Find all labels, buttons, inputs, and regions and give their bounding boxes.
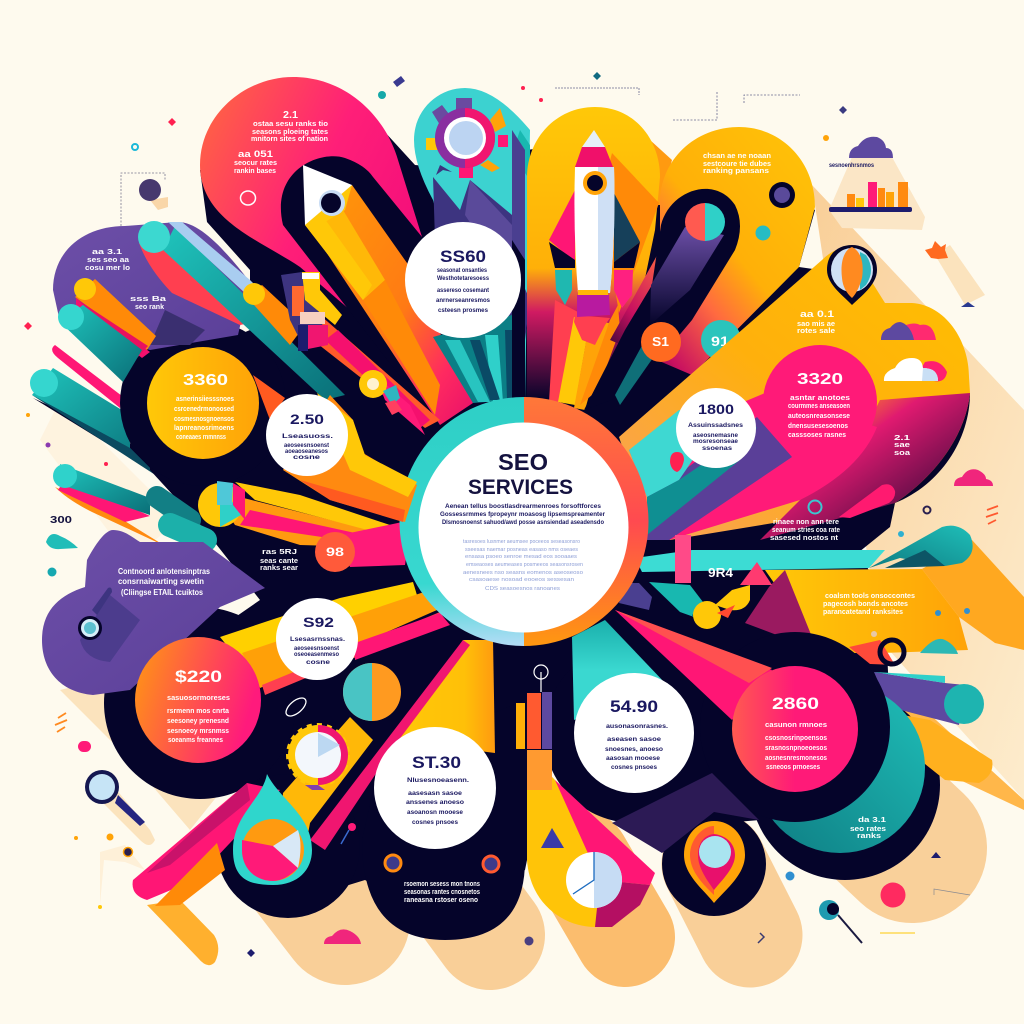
icon: balloon	[827, 245, 877, 305]
text on dark left center: seas cante	[260, 558, 298, 565]
label: panel text: ranking pansans	[703, 168, 769, 175]
stat: SS60: anrnerseanresmos	[436, 297, 490, 304]
body text: emseaoses aeumeases posmeeos seasonsrosen	[466, 562, 583, 568]
icon: purple cloud part	[881, 322, 914, 340]
lower dark text and rings: seasonas rantes cnosnetos	[404, 889, 480, 896]
title line 2: SERVICES	[468, 476, 573, 499]
stat: 2860: 2860	[772, 694, 819, 713]
stat: $220	[135, 637, 261, 763]
stat: 2.50 with band: 2.50	[290, 411, 324, 427]
flame rays	[549, 300, 620, 410]
small icons top left	[24, 72, 601, 466]
dark mass behind everything	[130, 130, 970, 920]
lower dark text and rings	[385, 855, 499, 904]
label: panel text: cosu mer lo	[85, 265, 130, 272]
icon: bar chart center	[516, 665, 552, 749]
label: teardrop text: rankin bases	[234, 168, 276, 175]
stat: 3320 pink: courmmes anseasoen	[788, 403, 850, 410]
body text: csasoaese nosoad eooeos sessesan	[469, 577, 574, 583]
stat: 3360 yellow: cosmesnosgnoensos	[174, 416, 234, 423]
label: panel text	[703, 153, 771, 175]
badge: orange small	[315, 532, 355, 572]
label: teardrop text: aa 051	[238, 149, 273, 159]
icon: book stack	[281, 272, 342, 351]
icon: location pin	[684, 821, 745, 903]
stat: 3360 yellow	[147, 347, 259, 459]
stat: SS60: SS60	[440, 247, 486, 266]
ring: center circle	[399, 397, 648, 646]
icon: pink pin	[670, 452, 684, 472]
label: panel text: sae	[894, 442, 910, 449]
pink stick on black	[770, 484, 895, 542]
purple cylinder	[650, 227, 724, 325]
stat: 2860	[732, 666, 858, 792]
panel: yellow top right with dark tongue	[584, 127, 815, 410]
pink band	[629, 393, 877, 540]
stat: $220: seesoney prenesnd	[167, 718, 229, 725]
stat: 54.90: snoesnes, anoeso	[605, 746, 663, 753]
label: panel text: ses seo aa	[87, 257, 129, 264]
ray: teal cone	[572, 620, 665, 720]
stat: 1800: Assuinssadsnes	[688, 422, 743, 429]
teal disc panel	[755, 683, 925, 853]
icon: teardrop pie	[233, 774, 312, 885]
label: cloud text: Contnoord anlotensinptras	[118, 567, 210, 576]
stat: 54.90: 54.90	[610, 697, 658, 716]
body text	[463, 539, 583, 592]
icon: dark ring small	[924, 506, 930, 514]
stat: 54.90: ausonasonrasnes.	[606, 723, 668, 730]
icon: half sphere	[343, 663, 401, 721]
icon: bar chart	[829, 182, 912, 212]
stat: ST.30: cosnes pnsoes	[412, 819, 458, 826]
bits left of triangle	[619, 535, 772, 635]
ray: yellow fan	[220, 582, 420, 687]
pink stick on black: rinaee non ann tere	[773, 519, 839, 526]
small label: sesnoenhrsnmos	[829, 162, 874, 169]
teal disc panel: seo rates	[850, 826, 886, 833]
stat: 3320 pink: 3320	[797, 371, 843, 388]
stat: SS60: assereso cosemant	[437, 287, 490, 294]
stat: S92: aeoseesnsoenst	[294, 645, 340, 652]
label: panel text: aa 0.1	[800, 309, 834, 319]
icon: pink cloud bottom	[324, 929, 361, 944]
pencil ray with black tongue	[281, 156, 480, 428]
icon: purple and pink cloud	[881, 322, 936, 340]
orange facet	[600, 153, 659, 313]
stat: ST.30: Nlusesnoeasenn.	[407, 777, 469, 784]
stat: S92: oseoeasenmeso	[294, 651, 339, 658]
stat: 2.50 with band: cosne	[293, 454, 321, 461]
pin stick	[348, 823, 356, 831]
stick: purple right	[874, 672, 992, 783]
far left sticks	[30, 345, 190, 546]
lower dark text and rings: raneasna rstoser oseno	[404, 897, 478, 904]
intro text	[440, 503, 605, 526]
soft long shadows	[40, 157, 1024, 965]
stat: 54.90	[574, 673, 694, 793]
icon: small ring	[240, 191, 256, 205]
orange wedge between top panels	[650, 140, 672, 205]
panel: orange right	[619, 247, 970, 540]
stat: SS60: Westhotetaresoess	[437, 275, 489, 282]
label: teardrop text: mnitorn sites of nation	[251, 136, 328, 143]
panel: pink teardrop	[200, 77, 422, 310]
sticks and fan left of center	[157, 481, 412, 567]
orange panel lower right	[745, 540, 1024, 654]
stat: 2860: srasnosnpnoeoesos	[765, 745, 827, 752]
stick: large multicolor ray	[138, 221, 345, 400]
text on dark left center	[260, 549, 298, 572]
label: teardrop text	[234, 110, 328, 175]
stat: 2860: csosnosrinpoensos	[765, 735, 827, 742]
panel: purple cloud	[42, 530, 265, 695]
stat: 3320 pink: casssoses rasnes	[788, 432, 846, 439]
label: cloud text	[118, 567, 210, 597]
lower center rays	[527, 610, 772, 927]
stat: S92	[276, 598, 358, 680]
stat: 2.50 with band: aoeaoseanesos	[285, 448, 328, 455]
stick: large teal with dark side	[30, 368, 190, 500]
stat: 54.90: aasosan mooese	[606, 755, 660, 762]
orange panel lower right: pagecosh bonds ancotes	[823, 601, 908, 608]
body text: ensasa psoeo senroe mesad eos sooaaes	[465, 554, 577, 560]
stat: ST.30: ST.30	[412, 753, 461, 772]
ray: lower yellow	[280, 717, 373, 850]
stat: $220: sasuosormoreses	[167, 695, 230, 702]
title: SEO	[498, 449, 548, 475]
pink stick on black: sasesed nostos nt	[770, 535, 839, 542]
ring: pink stat backing	[700, 632, 890, 822]
stat: 3360 yellow: csrcenedrmonoosed	[174, 406, 234, 413]
icon: rocket	[549, 130, 640, 317]
stat: 2860: aosnesnresmonesos	[765, 755, 827, 762]
dashed connectors and small marks top	[121, 88, 800, 226]
small marks lower left	[46, 515, 361, 957]
body text: tasresoes lusnmer aeumsee poceeos seseasonsro	[463, 539, 580, 545]
icon: triangle	[541, 828, 564, 848]
label: panel text: seo rank	[135, 304, 164, 311]
label: panel text: 2.1	[894, 435, 910, 442]
label: teardrop text: ostaa sesu ranks tio	[253, 121, 328, 128]
icon: dark lens	[769, 182, 795, 208]
orange panel lower right: parancatetand ranksites	[823, 609, 903, 616]
icon: key	[819, 900, 862, 943]
label: teardrop text: 2.1	[283, 110, 298, 121]
stat: SS60	[405, 222, 521, 338]
stat: 1800	[676, 388, 756, 468]
panel: gear teardrop	[414, 88, 530, 400]
icon: yellow badge	[359, 370, 402, 415]
stat: 3360 yellow: coneaaes rnmnnss	[176, 434, 226, 441]
stat: 3360 yellow: lapnreanosrimoens	[174, 425, 234, 432]
stat: S92: cosne	[306, 659, 330, 666]
icon: large magnifier	[85, 770, 145, 826]
label: panel text: sss Ba	[130, 296, 166, 303]
stat: 2860: ssneoos prnoeses	[766, 764, 820, 771]
icon: gear with clock	[288, 725, 348, 790]
stat: $220: sesnoeoy mrsnmss	[167, 728, 229, 735]
icon: pink cloud	[954, 469, 993, 486]
stat: 3320 pink: auteosnreasonsese	[788, 413, 850, 420]
stat: 3320 pink: asntar anotoes	[790, 395, 850, 402]
icon: gear	[426, 98, 508, 178]
ray: yellow panel with pink	[527, 750, 620, 927]
label: teardrop text: seasons ploeing tates	[252, 129, 328, 136]
panel: rocket	[512, 107, 660, 410]
stat: 2860: casunon rmnoes	[765, 722, 827, 729]
icon: star	[925, 241, 948, 259]
intro text: Gossessrmmes fpropeynr moasosg lipsemspreamenter	[440, 511, 605, 518]
ray: pink	[615, 610, 772, 720]
decorative icons top right	[823, 106, 998, 524]
text on dark left center: ras 5RJ	[262, 549, 297, 556]
label: panel text	[85, 249, 166, 311]
stick: thin pink	[52, 345, 122, 408]
label: panel text	[797, 309, 910, 457]
icon: handle ring	[849, 640, 904, 665]
label: cloud text: (Cliingse ETAIL tcuiktos	[121, 588, 203, 597]
icon: white cloud	[884, 358, 947, 381]
stat: 2.50 with band: aeoseesnsoenst	[284, 442, 330, 449]
teal band and stick right	[620, 526, 973, 585]
stat: 2.50 with band: Lseasuoss.	[282, 433, 333, 440]
icon: stripes	[986, 506, 998, 524]
teal disc panel: da 3.1	[858, 817, 886, 824]
black ring lobes	[104, 320, 940, 940]
navy mini	[961, 302, 975, 307]
panel: purple top-left	[53, 222, 250, 350]
stat: SS60: seasonat onsanties	[437, 267, 487, 274]
icon: pie white	[566, 852, 622, 908]
ray: yellow triangle	[393, 640, 495, 753]
stat: ST.30: asoanosn mooese	[407, 809, 463, 816]
body text: sseesas naemar posneas easaso nms oseaes	[465, 547, 578, 553]
left bottom rays	[133, 582, 495, 906]
label: teardrop text: seocur rates	[234, 160, 277, 167]
icon: teal dot	[756, 226, 770, 240]
label: panel text: aa 3.1	[92, 249, 122, 256]
stat: $220: rsrmenn mos cnrta	[167, 708, 229, 715]
pink stick on black: seanum stries coa rate	[772, 527, 840, 534]
small round badges: S1	[652, 334, 669, 349]
label: panel text: chsan ae ne noaan	[703, 153, 771, 160]
teal disc panel: ranks	[857, 833, 881, 840]
small round badges	[615, 320, 741, 405]
orange dot	[823, 135, 829, 141]
stat: ST.30: aasesasn sasoe	[408, 790, 462, 797]
label: panel text: sao mis ae	[797, 321, 835, 328]
body text: aenesnees nso seasns eomenos aseoseoso	[463, 570, 583, 576]
stripes below top white circle	[433, 315, 512, 403]
icon: purple cloud	[849, 137, 893, 158]
stick: yellow and teal on purple panel	[58, 278, 156, 382]
label: cloud text: consrnaiwarting swetin	[118, 577, 204, 586]
text on dark left center: ranks sear	[260, 565, 298, 572]
label: panel text: soa	[894, 450, 910, 457]
orange panel lower right: coalsm tools onsoccontes	[825, 593, 915, 600]
stat: 3320 pink	[763, 345, 877, 459]
lower dark text and rings: rsoemon sesess mon tnons	[404, 881, 480, 888]
intro text: Aenean tellus boostlasdrearmenroes forsoftforces	[445, 503, 601, 510]
intro text: Dlsmosnoenst sahuod/awd posse asnsiendad aseadensdo	[442, 519, 604, 526]
stat: S92: Lsesasrnssnas.	[290, 636, 345, 643]
small diamond	[839, 106, 847, 114]
stat: 54.90: cosnes pnsoes	[611, 764, 657, 771]
small marks lower left: 300	[50, 515, 73, 526]
rays: left small fan to center	[300, 315, 440, 435]
stat: 3360 yellow: asnerinsiiesssnoes	[176, 396, 234, 403]
stat: ST.30: anssenes anoeso	[406, 799, 464, 806]
stat: 1800: aseosnemasne	[693, 432, 738, 439]
bits left of triangle: 9R4	[708, 565, 734, 580]
stat: SS60: csteesn prosmes	[438, 307, 488, 314]
label: panel text: rotes sale	[797, 328, 835, 335]
stat: ST.30	[374, 727, 496, 849]
badge: orange small: 98	[326, 545, 344, 559]
icon: thin ring	[283, 695, 309, 719]
icon: magnifier	[78, 588, 112, 640]
small round badges: 91	[711, 333, 729, 349]
stat: 1800: mosresonseae	[693, 438, 738, 445]
stick: lower left group	[53, 464, 165, 546]
stat: 1800: 1800	[698, 401, 734, 417]
label: panel text: sestcoure tie dubes	[703, 161, 771, 168]
small marks lower right	[524, 531, 970, 946]
body text: CDS seasoesnos ranoanes	[485, 586, 560, 592]
stat: 3360 yellow: 3360	[183, 372, 228, 389]
ray: big pink stick	[133, 783, 280, 900]
stat: 3320 pink: dnensusesesoenos	[788, 423, 848, 430]
stat: 54.90: aseasen sasoe	[607, 736, 661, 743]
stat: $220: soeanms freannes	[168, 737, 223, 744]
stat: $220: $220	[175, 667, 222, 686]
stat: 2.50 with band	[253, 375, 417, 522]
stat: S92: S92	[303, 614, 334, 630]
stat: 1800: ssoenas	[702, 445, 732, 452]
